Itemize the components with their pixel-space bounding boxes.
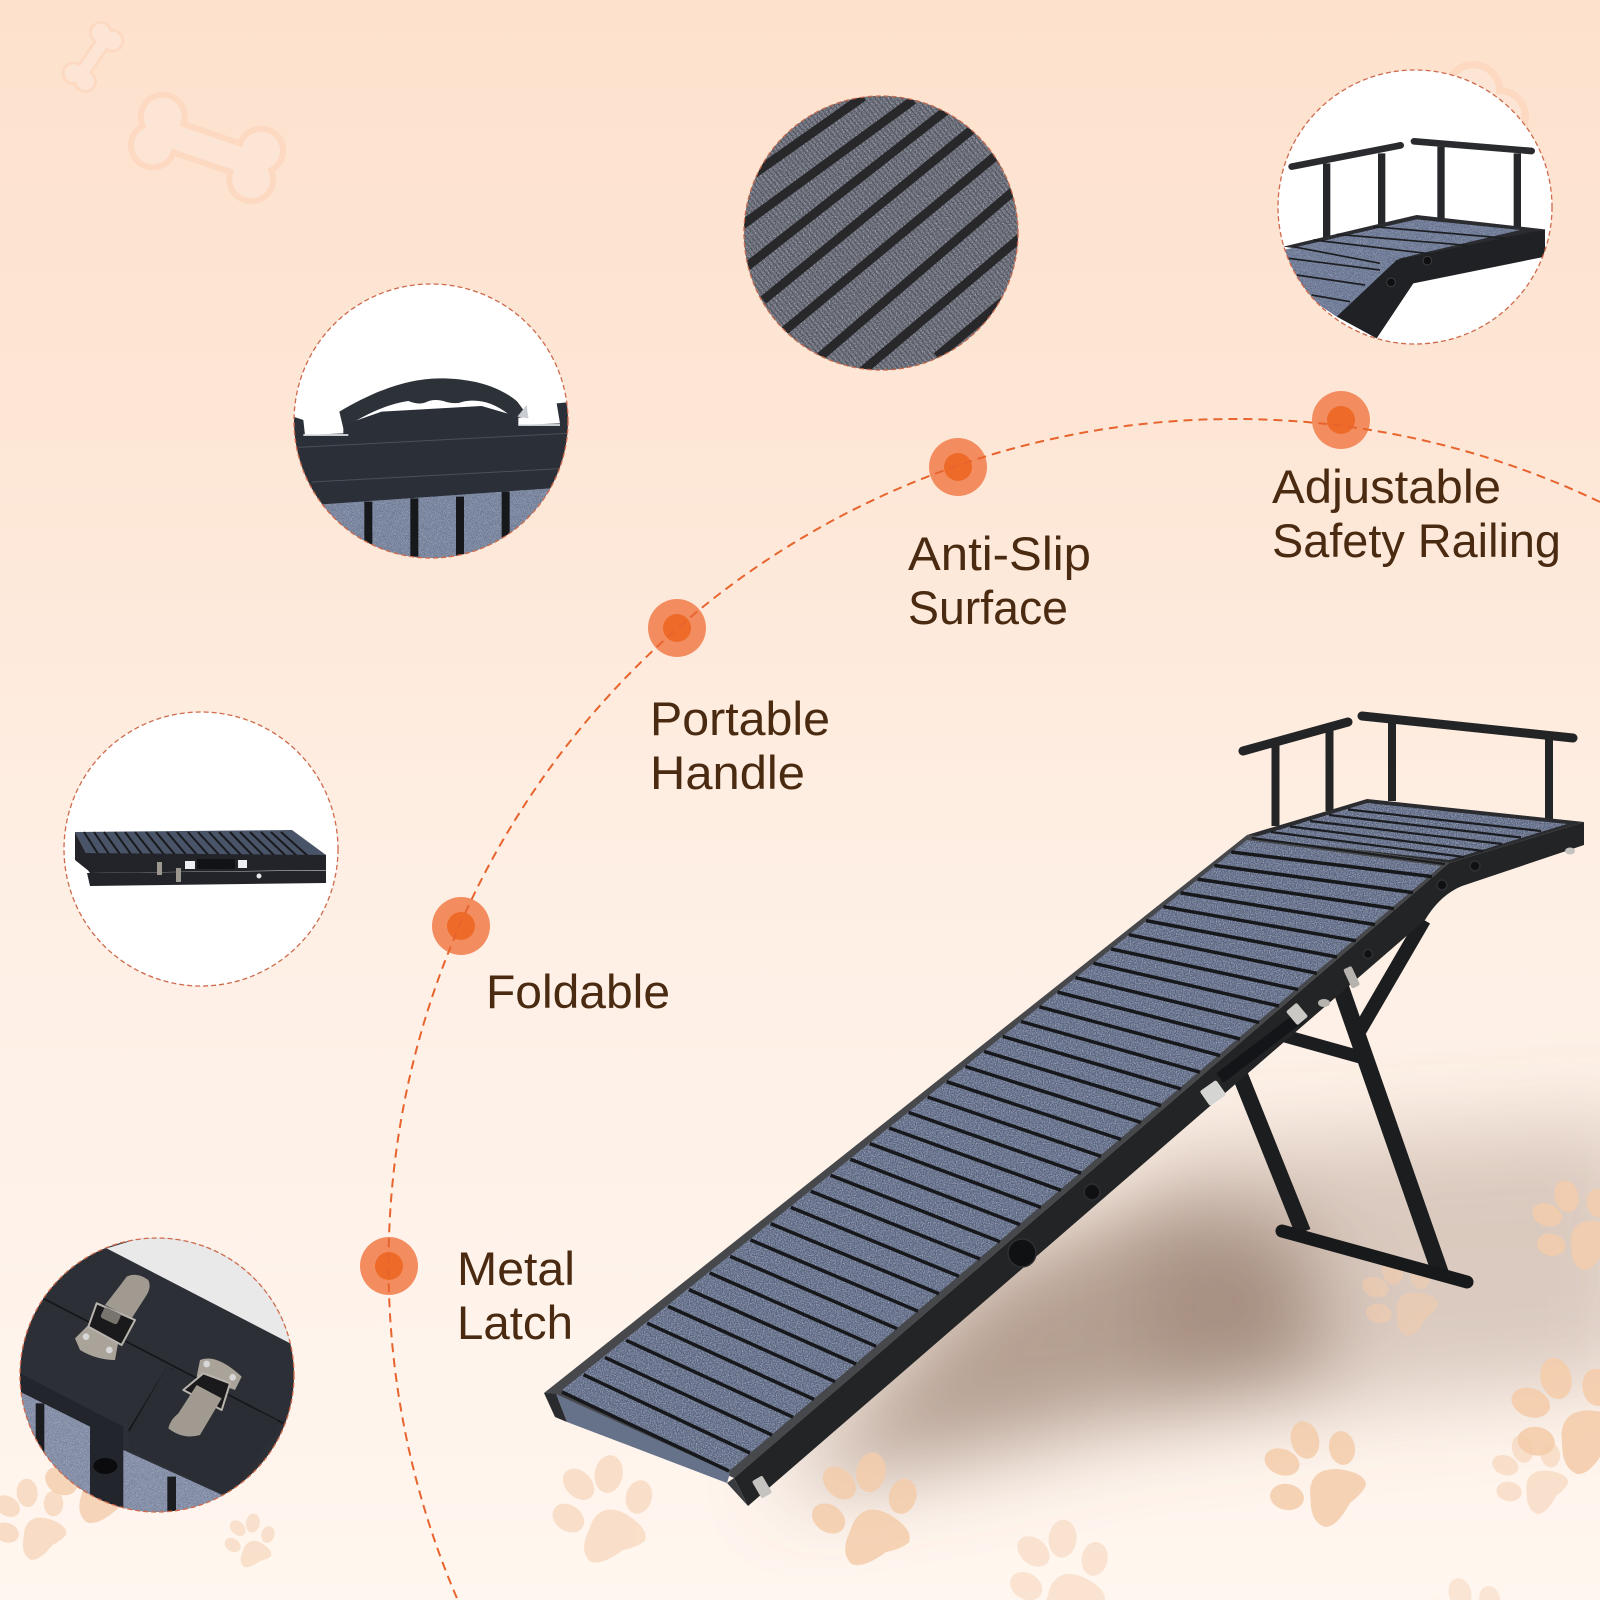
label: portable handle bbox=[650, 692, 830, 799]
label: metal latch: Latch bbox=[457, 1296, 573, 1349]
label: adjustable safety railing: Safety Railing bbox=[1272, 514, 1561, 567]
label: foldable: Foldable bbox=[486, 965, 670, 1018]
carpet grooves bbox=[562, 852, 1432, 1471]
carpet front lip bbox=[556, 1394, 730, 1483]
label: anti-slip surface bbox=[908, 527, 1091, 634]
label: portable handle: Portable bbox=[650, 692, 830, 745]
label: adjustable safety railing bbox=[1272, 460, 1561, 567]
ramp frame lip bbox=[544, 835, 1449, 1478]
dashed timeline arc bbox=[389, 419, 1600, 1600]
label: adjustable safety railing: Adjustable bbox=[1272, 460, 1501, 513]
platform frame bbox=[1247, 799, 1584, 863]
platform carpet bbox=[1252, 803, 1567, 860]
side handle strap and latches bbox=[752, 848, 1575, 1499]
platform grooves bbox=[1252, 810, 1541, 864]
detail circle: anti-slip surface bbox=[740, 96, 1023, 372]
ramp carpet bbox=[562, 840, 1441, 1472]
detail circle: foldable bbox=[64, 712, 338, 986]
detail circle: metal latch bbox=[20, 1230, 307, 1520]
ramp side rail bbox=[734, 822, 1584, 1506]
ramp legs bbox=[1238, 920, 1467, 1282]
detail circle: safety railing bbox=[1278, 70, 1552, 344]
ramp front corner bbox=[727, 1478, 748, 1506]
label: portable handle: Handle bbox=[650, 746, 805, 799]
label: metal latch: Metal bbox=[457, 1242, 575, 1295]
ramp ground shadow bbox=[780, 1120, 1600, 1490]
main product: folding dog ramp bbox=[544, 716, 1584, 1506]
hinge bolts bbox=[1008, 861, 1480, 1267]
detail circle: portable handle bbox=[287, 284, 573, 563]
decorative bones bbox=[59, 18, 1536, 242]
timeline dots bbox=[360, 391, 1370, 1295]
label: anti-slip surface: Surface bbox=[908, 581, 1068, 634]
railing posts and bars bbox=[1243, 716, 1573, 826]
label: anti-slip surface: Anti-Slip bbox=[908, 527, 1091, 580]
decorative paw prints bbox=[0, 1178, 1600, 1600]
label: metal latch bbox=[457, 1242, 575, 1349]
